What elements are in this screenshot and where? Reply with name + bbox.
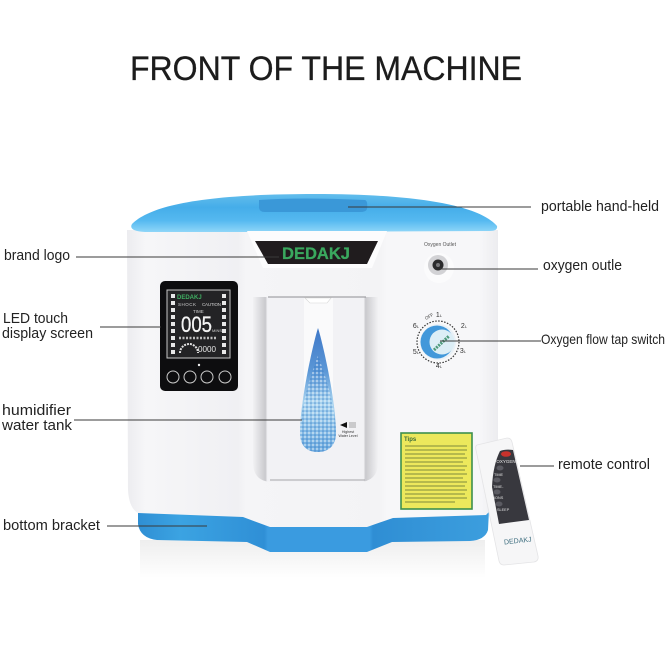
LED touch display screen: MINS [212, 328, 222, 333]
handle recess [259, 198, 367, 212]
LED touch display screen: 005 [181, 312, 212, 337]
remote control: SLEEP [497, 508, 510, 512]
oxygen flow dial [413, 312, 468, 370]
remote control: TIME- [493, 485, 504, 489]
remote control: DEDAKJ [504, 537, 532, 546]
oxygen outlet [424, 242, 457, 283]
oxygen flow dial: 4L [436, 363, 443, 370]
bottom bracket [138, 510, 489, 552]
callout: portable hand-held: portable hand-held [541, 199, 659, 215]
callout: oxygen outle: oxygen outle [543, 258, 622, 274]
oxygen flow dial: 3L [460, 348, 467, 355]
LED touch display screen [160, 281, 238, 391]
machine: oxygen concentrator [127, 194, 538, 578]
oxygen flow dial: OFF [424, 312, 435, 321]
humidifier water tank [253, 297, 378, 482]
oxygen flow dial: 6L [413, 323, 420, 330]
LED touch display screen: TIME [193, 309, 204, 314]
callout: LED touch display screen: LED touch [3, 311, 68, 327]
remote control: OXYGEN [496, 459, 516, 464]
tips label: Tips [404, 437, 417, 443]
oxygen flow dial: 2L [461, 323, 468, 330]
callout: humidifier water tank [1, 403, 302, 434]
callout: brand logo: brand logo [4, 248, 70, 264]
tips label [401, 433, 472, 509]
LED touch display screen: CAUTION [202, 302, 221, 307]
callout: remote control: remote control [558, 457, 650, 473]
remote control [476, 438, 538, 565]
callout: humidifier water tank: water tank [1, 418, 73, 434]
brand logo plate: DEDAKJ [282, 244, 350, 263]
remote control: IONS [494, 496, 504, 500]
callout: humidifier water tank: humidifier [2, 403, 71, 419]
title: FRONT OF THE MACHINE [130, 50, 522, 88]
humidifier water tank: Water Level [338, 434, 358, 438]
oxygen flow dial: 5L [413, 349, 420, 356]
floor shadow [140, 540, 485, 578]
LED touch display screen: 0000 [198, 345, 217, 354]
oxygen outlet: Oxygen Outlet [424, 242, 457, 248]
humidifier water tank: Highest [342, 430, 354, 434]
main body [127, 230, 498, 527]
LED touch display screen: DEDAKJ [177, 295, 202, 301]
oxygen flow dial: 1L [436, 312, 443, 319]
callout: LED touch display screen: display screen [2, 326, 93, 342]
callout: bottom bracket: bottom bracket [3, 518, 100, 534]
blue top cover [131, 194, 497, 232]
remote control: TIME [494, 473, 504, 477]
LED touch display screen: SHOCK [178, 302, 196, 307]
callout: LED touch display screen [2, 311, 161, 342]
brand logo plate [247, 231, 387, 268]
